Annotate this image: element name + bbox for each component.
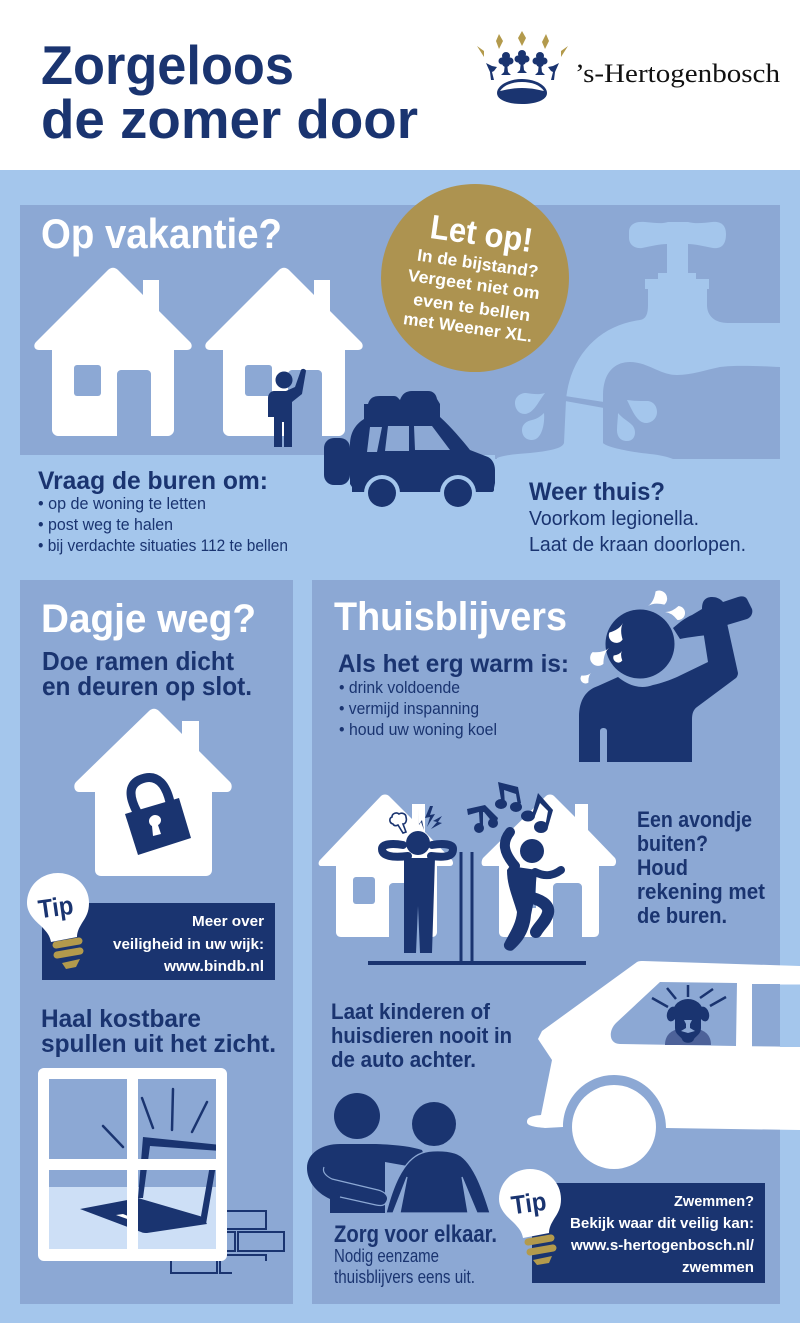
icon: light bulb: Tip [509, 1186, 548, 1220]
icon: person drinking and sweating [579, 591, 752, 762]
panel: op vakantie [20, 205, 780, 459]
panel: thuisblijvers [312, 580, 780, 1304]
text: laat kinderen [331, 999, 512, 1072]
icon: house left [34, 268, 192, 436]
text: zorg voor elkaar [334, 1221, 497, 1287]
panel: dagje weg [20, 580, 293, 1304]
logo: 's-Hertogenbosch crown: ’s-Hertogenbosch [575, 59, 780, 88]
text: als het erg warm is: • houd uw woning koel [339, 720, 497, 739]
text: laat kinderen: huisdieren nooit in [331, 1023, 512, 1048]
title [41, 34, 418, 150]
icon: bricks [171, 1211, 284, 1273]
icon: house right with neighbour [205, 268, 363, 447]
text: vraag de buren om [38, 467, 288, 555]
heading: thuisblijvers: Thuisblijvers [334, 595, 567, 639]
text: als het erg warm is: • vermijd inspanning [339, 699, 479, 718]
text: zorg voor elkaar: Zorg voor elkaar. [334, 1221, 497, 1248]
text: vraag de buren om: • bij verdachte situaties 112 te bellen [38, 536, 288, 555]
tip: zwemmen [499, 1169, 765, 1283]
title: Zorgeloos [41, 34, 294, 96]
icon: light bulb: Tip [36, 890, 75, 924]
text: weer thuis: Voorkom legionella. [529, 508, 699, 530]
text: een avondje buiten: Een avondje [637, 807, 752, 832]
text: vraag de buren om: Vraag de buren om: [38, 467, 268, 495]
text: vraag de buren om: • op de woning te letten [38, 494, 206, 513]
icon: music notes [467, 782, 553, 833]
text: als het erg warm is: • drink voldoende [339, 678, 460, 697]
text: weer thuis: Laat de kraan doorlopen. [529, 534, 746, 556]
icon: two people embracing [307, 1093, 490, 1213]
icon: car with luggage [324, 391, 495, 511]
callout: let op: met Weener XL. [402, 309, 533, 346]
icon: house with padlock [74, 709, 232, 876]
icon: light bulb [499, 1169, 561, 1265]
text: een avondje buiten: rekening met [637, 879, 766, 904]
tip: veiligheid in uw wijk [27, 873, 275, 980]
tip: veiligheid in uw wijk: Meer over [192, 913, 264, 930]
callout: let op [381, 184, 569, 372]
text: een avondje buiten [637, 807, 766, 928]
icon: light bulb [27, 873, 89, 969]
text: haal kostbare spullen: spullen uit het zicht. [41, 1030, 276, 1058]
text: als het erg warm is: Als het erg warm is: [338, 650, 569, 678]
icon: white car with dog [527, 961, 800, 1169]
text: haal kostbare spullen: Haal kostbare [41, 1005, 201, 1033]
tip: zwemmen: Zwemmen? [674, 1193, 754, 1210]
icon: two houses with noise and dancing person [319, 782, 616, 963]
icon: water tap [497, 222, 780, 470]
text: haal kostbare spullen [41, 1005, 276, 1058]
heading: op vakantie: Op vakantie? [41, 210, 282, 257]
tip: zwemmen: zwemmen [682, 1259, 754, 1276]
text: weer thuis [529, 478, 746, 556]
tip: zwemmen: www.s-hertogenbosch.nl/ [570, 1237, 755, 1254]
text: zorg voor elkaar: thuisblijvers eens uit. [334, 1267, 475, 1287]
callout: let op: In de bijstand? [416, 246, 539, 281]
icon: window with laptop [38, 1068, 227, 1261]
text: laat kinderen: de auto achter. [331, 1047, 476, 1072]
text: doe ramen dicht: Doe ramen dicht [42, 646, 234, 676]
text: als het erg warm is [338, 650, 569, 739]
text: weer thuis: Weer thuis? [529, 478, 665, 506]
tip: veiligheid in uw wijk: www.bindb.nl [163, 958, 264, 975]
text: een avondje buiten: buiten? [637, 831, 708, 856]
title: de zomer door [41, 88, 418, 150]
text: doe ramen dicht [42, 646, 252, 701]
text: zorg voor elkaar: Nodig eenzame [334, 1246, 439, 1266]
text: vraag de buren om: • post weg te halen [38, 515, 173, 534]
tip: zwemmen: Bekijk waar dit veilig kan: [570, 1215, 754, 1232]
callout: let op: Let op! [428, 208, 535, 260]
text: doe ramen dicht: en deuren op slot. [42, 671, 252, 701]
text: een avondje buiten: de buren. [637, 903, 727, 928]
text: een avondje buiten: Houd [637, 855, 688, 880]
heading: dagje weg: Dagje weg? [41, 597, 256, 641]
text: laat kinderen: Laat kinderen of [331, 999, 491, 1024]
callout: let op: even te bellen [412, 290, 532, 325]
tip: veiligheid in uw wijk: veiligheid in uw wijk: [113, 936, 264, 953]
logo: 's-Hertogenbosch crown [477, 31, 780, 104]
callout: let op: Vergeet niet om [407, 266, 541, 303]
